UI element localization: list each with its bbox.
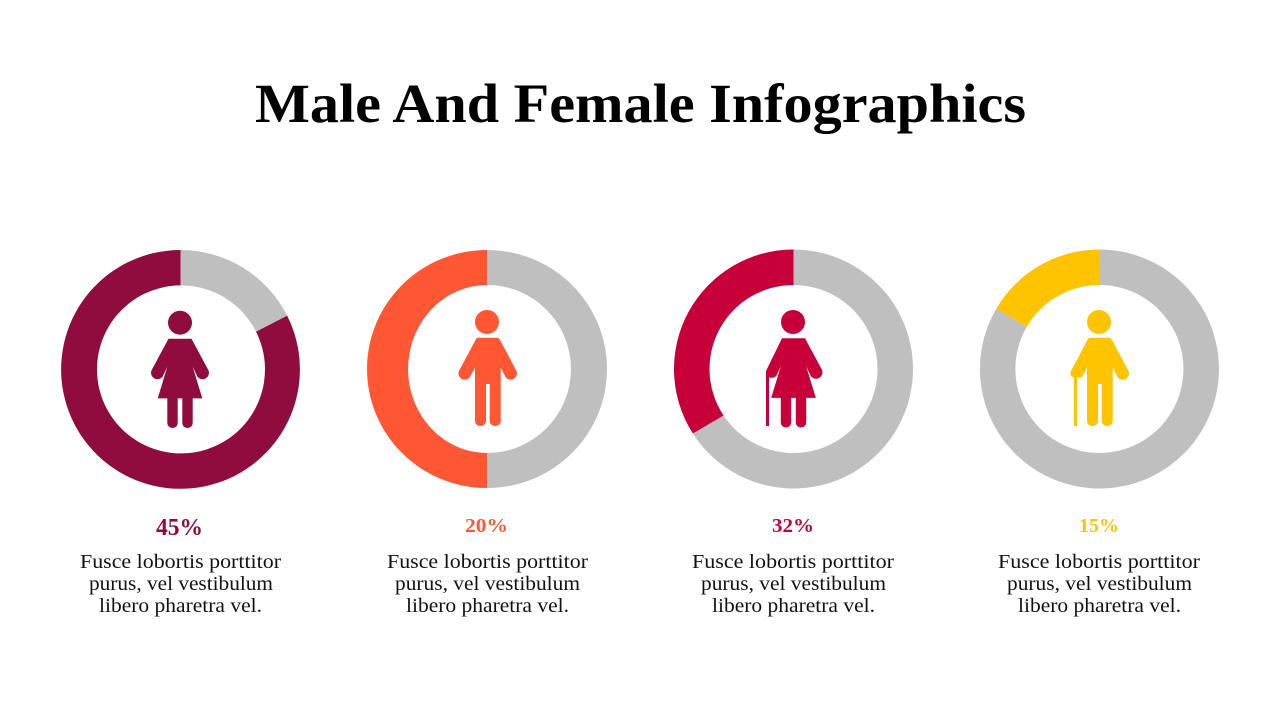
description text: purus, vel vestibulum bbox=[395, 573, 580, 595]
description text: Fusce lobortis porttitor bbox=[387, 551, 588, 573]
donut chart: 45% bbox=[61, 250, 300, 489]
donut chart: 15% bbox=[980, 250, 1219, 488]
icon: elderly woman with cane bbox=[766, 310, 822, 428]
title: Male And Female Infographics bbox=[255, 73, 1026, 134]
percentage: 45%: 45% bbox=[156, 515, 203, 541]
icon: woman bbox=[151, 311, 209, 428]
panel: 20% male bbox=[367, 250, 607, 617]
panel: 45% female bbox=[61, 250, 300, 617]
description text bbox=[80, 551, 281, 617]
description text: purus, vel vestibulum bbox=[1007, 573, 1192, 595]
description text: purus, vel vestibulum bbox=[89, 573, 273, 595]
donut chart: 32% bbox=[674, 249, 913, 488]
description text bbox=[387, 551, 588, 617]
description text: purus, vel vestibulum bbox=[701, 573, 886, 595]
percentage: 32%: 32% bbox=[772, 515, 814, 537]
description text: Fusce lobortis porttitor bbox=[998, 551, 1200, 573]
description text bbox=[692, 551, 894, 617]
icon: man bbox=[459, 310, 517, 426]
description text: libero pharetra vel. bbox=[1018, 595, 1181, 617]
description text bbox=[998, 551, 1200, 617]
donut chart: 20% bbox=[367, 250, 607, 488]
description text: Fusce lobortis porttitor bbox=[80, 551, 281, 573]
description text: libero pharetra vel. bbox=[712, 595, 875, 617]
percentage: 20%: 20% bbox=[465, 515, 508, 537]
description text: libero pharetra vel. bbox=[99, 595, 262, 617]
panel: 32% elderly woman bbox=[674, 249, 913, 617]
percentage: 15%: 15% bbox=[1079, 515, 1119, 537]
icon: elderly man with cane bbox=[1070, 310, 1129, 426]
description text: libero pharetra vel. bbox=[406, 595, 569, 617]
description text: Fusce lobortis porttitor bbox=[692, 551, 894, 573]
panel: 15% elderly man bbox=[980, 250, 1219, 617]
